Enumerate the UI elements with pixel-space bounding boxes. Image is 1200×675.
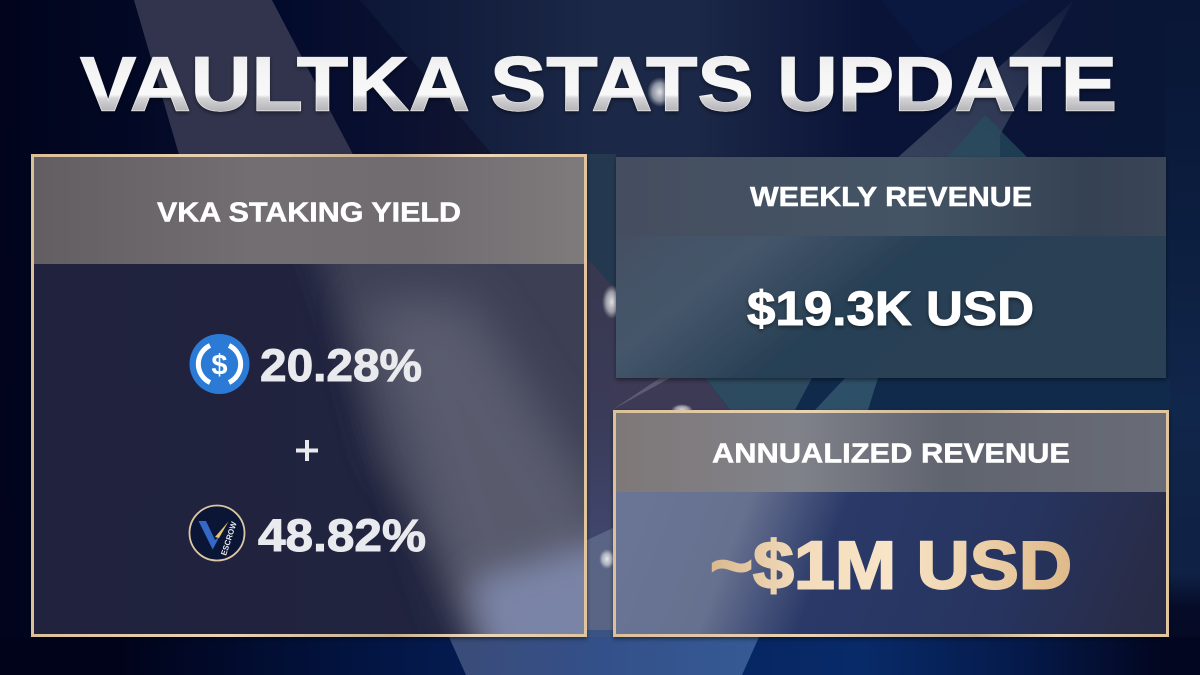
panel header: VKA staking yield (34, 157, 584, 264)
stat: USDC yield: 20.28% (260, 340, 422, 391)
icon: VKA escrow: ESCROW (219, 520, 239, 557)
title: VAULTKA STATS UPDATE (80, 42, 1117, 128)
panel header: VKA staking yield: VKA STAKING YIELD (157, 196, 461, 228)
stat: weekly revenue value: $19.3K USD (747, 283, 1034, 336)
panel header: annualized revenue (616, 413, 1166, 492)
icon: USDC: $ (211, 350, 228, 382)
panel header: weekly revenue (616, 157, 1166, 236)
panel header: weekly revenue: WEEKLY REVENUE (750, 181, 1032, 212)
panel: weekly revenue (616, 157, 1166, 378)
panel: VKA staking yield (31, 154, 590, 642)
panel header: annualized revenue: ANNUALIZED REVENUE (712, 438, 1070, 468)
stat: annualized revenue value: ~$1M USD (710, 528, 1072, 604)
icon: VKA escrow (190, 506, 244, 560)
panel: annualized revenue (613, 410, 1169, 637)
icon: USDC (190, 334, 250, 394)
stat: VKA yield: 48.82% (258, 510, 426, 561)
plus sign (296, 440, 318, 461)
